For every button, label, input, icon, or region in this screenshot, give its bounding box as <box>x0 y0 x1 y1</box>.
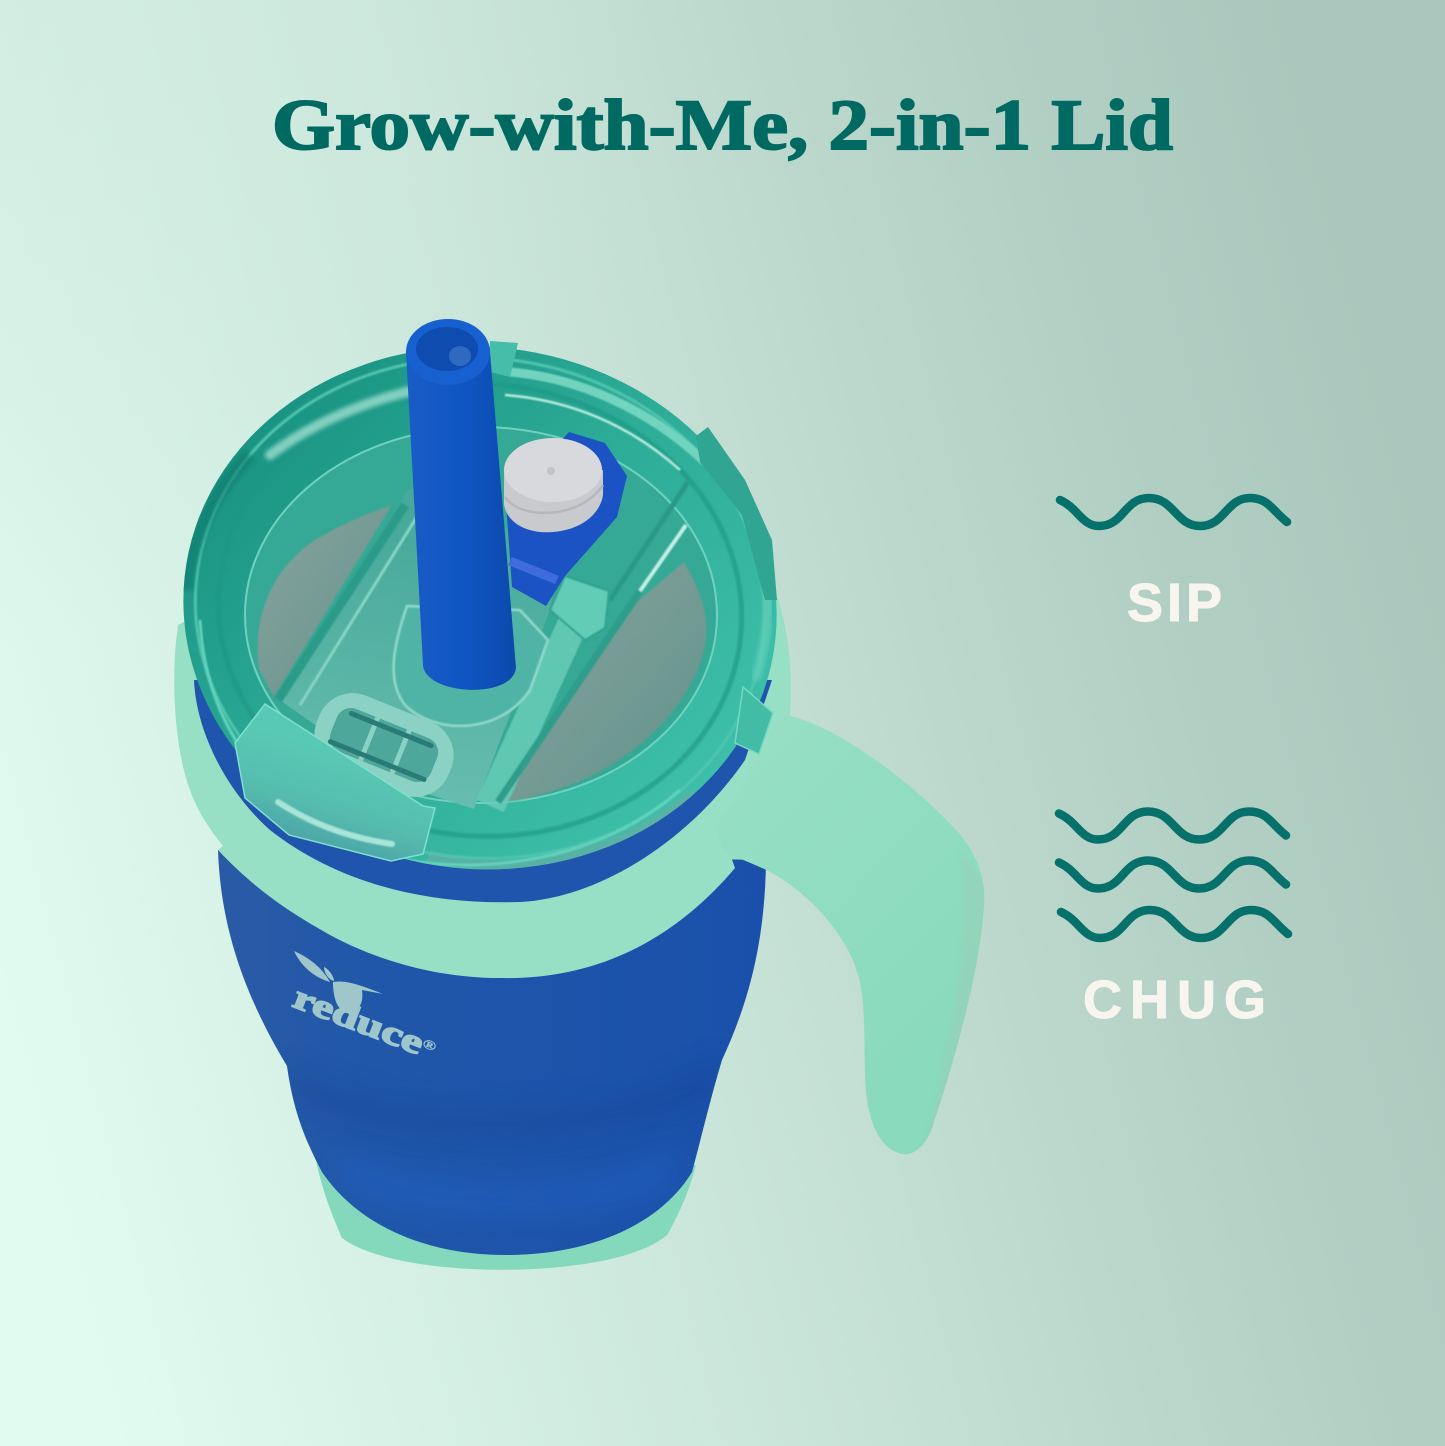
top tab <box>490 341 518 377</box>
right rail hinge block <box>550 576 609 640</box>
logo wordmark: reduce <box>288 979 392 1048</box>
straw well <box>394 606 548 726</box>
reflection left <box>258 505 392 697</box>
logo leaves and cup icon <box>294 951 383 1012</box>
blue neck <box>194 680 772 902</box>
tumbler product illustration <box>157 317 1000 1270</box>
front vent <box>304 682 464 808</box>
reflection right <box>498 562 706 802</box>
center channel <box>277 480 560 809</box>
diagonal rails <box>278 482 688 806</box>
right hinge clip <box>735 687 773 754</box>
right tab <box>696 427 777 600</box>
logo wordmark: ® <box>421 1035 439 1054</box>
label: SIP: SIP <box>1127 573 1222 633</box>
chug flow icon: three waves <box>1059 812 1288 938</box>
logo: reduce <box>288 951 442 1067</box>
base ring <box>316 1160 696 1270</box>
cap holder <box>506 432 627 606</box>
lid inner well <box>245 427 717 803</box>
redraw band over body <box>218 840 735 978</box>
lid <box>183 341 777 870</box>
sip flow icon: single wave <box>1060 498 1287 526</box>
front tab <box>235 704 435 861</box>
label: CHUG: CHUG <box>1083 970 1266 1030</box>
mug body <box>218 850 766 1255</box>
silicone band <box>174 560 791 978</box>
tab reflection <box>278 802 392 844</box>
rim highlights <box>193 358 766 860</box>
lid outer ring <box>157 317 803 899</box>
handle <box>740 716 984 1154</box>
title: Grow-with-Me, 2-in-1 Lid <box>272 85 1173 165</box>
lower rim grey glass <box>426 790 694 870</box>
silicone cap <box>504 438 603 532</box>
straw <box>406 319 516 690</box>
